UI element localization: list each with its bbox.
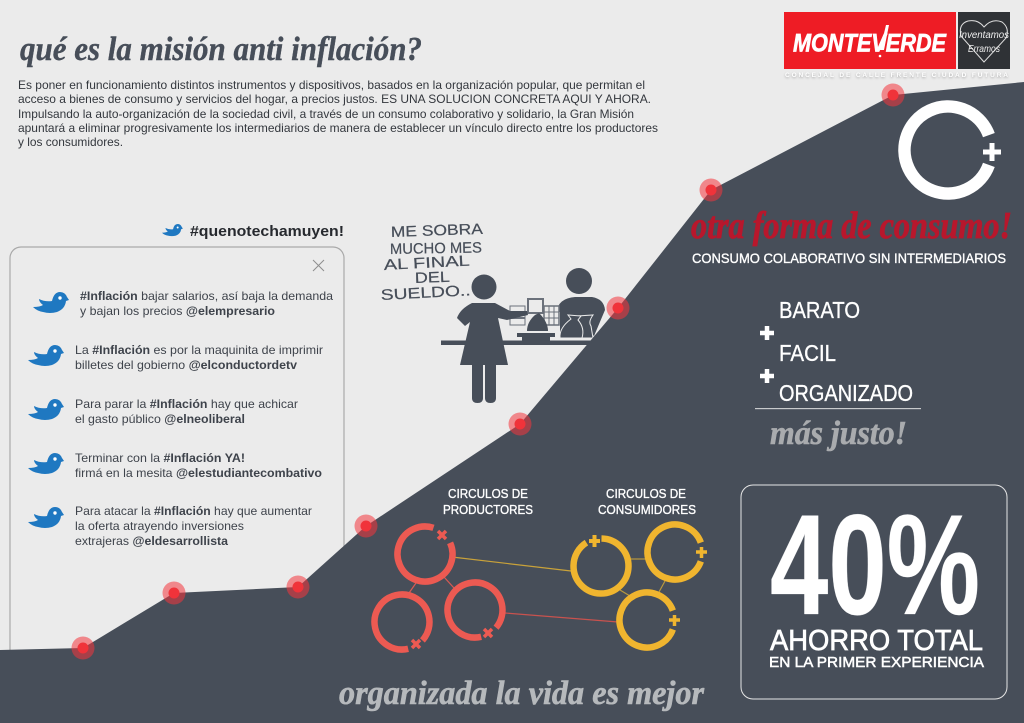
intro text block: Impulsando la auto-organización de la sociedad civil, a través de un consumo colaborativo y solidario, la Gran Misión (18, 107, 634, 121)
handwritten speech: MUCHO MES (390, 239, 482, 258)
circles: consumidores (573, 517, 710, 655)
tweet 1 (33, 289, 333, 318)
grocery bags (560, 315, 593, 338)
tweet 3: Para parar la #Inflación hay que achicar (75, 397, 298, 411)
equation: más justo: FACIL (779, 340, 836, 366)
icon: big C plus (892, 94, 1004, 206)
callout: 40% savings: EN LA PRIMER EXPERIENCIA (769, 654, 984, 671)
tweet 4: firmá en la mesita @elestudiantecombativo (75, 466, 322, 480)
handwritten speech (380, 221, 483, 304)
tweet 5: la oferta atrayendo inversiones (75, 519, 244, 533)
label: circulos de productores: CIRCULOS DE (448, 486, 528, 501)
label: circulos de productores (443, 486, 533, 517)
cashier (556, 268, 605, 337)
icon: close (313, 260, 324, 271)
intro text block: acceso a bienes de consumo y servicios del hogar, a precios justos. ES UNA SOLUCION CONCRETA AQUI Y AHORA. (18, 92, 651, 106)
handwritten speech: ME SOBRA (391, 221, 483, 241)
tweet 5: Para atacar la #Inflación hay que aumentar (75, 504, 312, 518)
tweet 5: extrajeras @eldesarrollista (75, 534, 228, 548)
equation: más justo (755, 297, 921, 452)
tagline: organizada la vida es mejor (339, 675, 705, 712)
subheading: CONSUMO COLABORATIVO SIN INTERMEDIARIOS (692, 250, 1006, 266)
tweet 2 (28, 343, 323, 372)
callout: 40% savings: AHORRO TOTAL (770, 625, 983, 657)
tweet 5 (28, 504, 312, 548)
logo: Monteverde: CONCEJAL DE CALLE FRENTE CIUDAD FUTURA (785, 72, 1008, 79)
circles: productores (369, 518, 508, 655)
shopper (457, 274, 528, 403)
tweet 2: La #Inflación es por la maquinita de imprimir (75, 343, 323, 357)
logo: Monteverde: MONTEVERDE (793, 30, 947, 58)
tweet 4: Terminar con la #Inflación YA! (75, 451, 245, 465)
label: circulos de consumidores: CONSUMIDORES (598, 502, 696, 517)
equation: más justo: BARATO (779, 297, 860, 323)
title: qué es la misión anti inflación? (20, 31, 422, 68)
tweet 1: y bajan los precios @elempresario (80, 304, 275, 318)
tweet 4 (28, 451, 322, 480)
intro text block: Es poner en funcionamiento distintos instrumentos y dispositivos, basados en la organización popular, que permitan el (18, 78, 645, 92)
handwritten speech: SUELDO.. (380, 282, 471, 304)
handwritten speech: AL FINAL (383, 253, 470, 274)
intro text block (18, 78, 658, 149)
label: circulos de consumidores: CIRCULOS DE (606, 486, 686, 501)
tweet 2: billetes del gobierno @elconductordetv (75, 358, 297, 372)
intro text block: apuntará a eliminar progresivamente los intermediarios de manera de establecer un vínculo directo entre los productores (18, 121, 658, 135)
equation: más justo: más justo! (770, 415, 907, 452)
tweet 3: el gasto público @elneoliberal (75, 412, 245, 426)
label: circulos de productores: PRODUCTORES (443, 502, 533, 517)
pictogram: shopper and cashier at counter (441, 268, 605, 403)
label: circulos de consumidores (598, 486, 696, 517)
tweet 3 (28, 397, 298, 426)
tweet 1: #Inflación bajar salarios, así baja la demanda (80, 289, 333, 303)
equation: más justo: ORGANIZADO (779, 380, 913, 406)
logo: Monteverde (784, 12, 1010, 79)
panel: tweets (10, 247, 344, 717)
handwritten speech: DEL (415, 269, 450, 287)
callout: 40% savings (741, 485, 1007, 699)
cash register and scale (510, 299, 559, 341)
intro text block: y los consumidores. (18, 135, 123, 149)
logo: Monteverde: Inventamos (959, 30, 1009, 41)
logo: Monteverde: Erramos (968, 44, 1000, 55)
hashtag heading: #quenotechamuyen! (190, 223, 344, 240)
timeline dots (72, 84, 904, 660)
network links (409, 557, 665, 622)
